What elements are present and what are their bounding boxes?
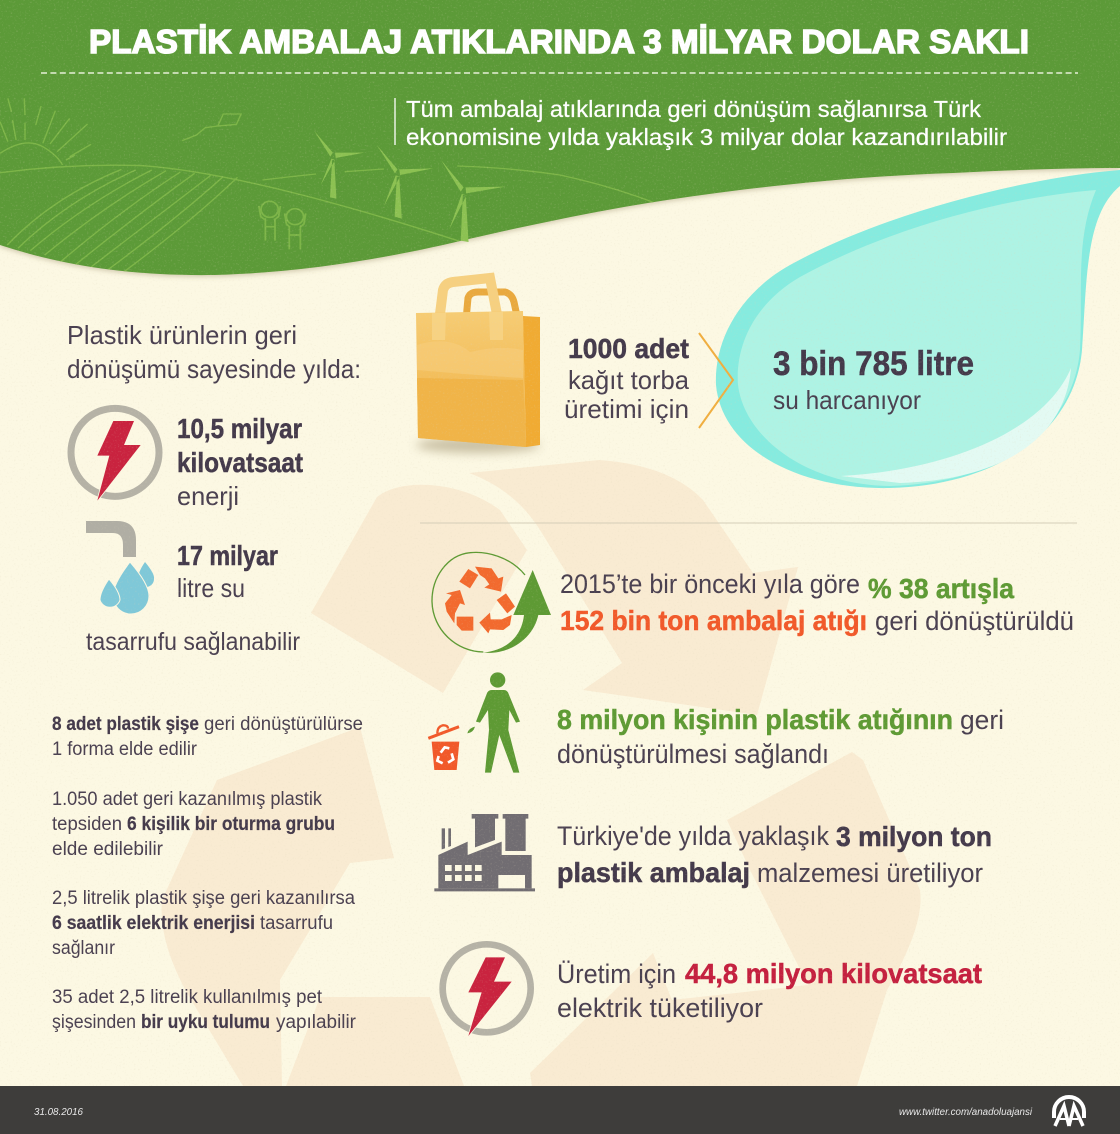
icon: AA logo	[1054, 1097, 1084, 1126]
fact: electricity: 2,5 litrelik plastik şişe geri kazanılırsa	[52, 888, 355, 909]
fact: seating	[52, 789, 335, 860]
facts list	[52, 714, 363, 1033]
bag text: üretimi için	[564, 394, 689, 424]
twitter address: www.twitter.com/anadoluajansi	[899, 1107, 1033, 1118]
production text: malzemesi üretiliyor	[757, 858, 983, 888]
fact: sleeping bag	[52, 987, 357, 1033]
fact: sleeping bag: 35 adet 2,5 litrelik kullanılmış pet	[52, 987, 323, 1008]
background recycling symbol	[162, 460, 921, 1086]
subtitle: Tüm ambalaj atıklarında geri dönüşüm sağlanırsa Türk	[406, 96, 982, 122]
wind turbines	[314, 131, 506, 242]
fact: sleeping bag: şişesinden	[52, 1012, 136, 1033]
production text: plastik ambalaj	[557, 857, 750, 888]
production text: Türkiye'de yılda yaklaşık	[557, 821, 829, 851]
fact: seating: 6 kişilik bir oturma grubu	[127, 814, 335, 835]
energy text	[177, 413, 303, 511]
water text: su harcanıyor	[773, 385, 921, 415]
fact: electricity: tasarrufu	[260, 913, 333, 934]
water drop	[716, 170, 1120, 488]
fact: seating: elde edilebilir	[52, 839, 164, 860]
divider	[420, 522, 1077, 524]
drop highlight	[841, 368, 1071, 483]
energy text: kilovatsaat	[177, 447, 303, 478]
fact: sleeping bag: bir uyku tulumu	[141, 1012, 270, 1033]
water text	[86, 540, 300, 656]
turbine 1	[314, 131, 364, 199]
fact: electricity: 6 saatlik elektrik enerjisi	[52, 913, 255, 934]
footer	[0, 1086, 1120, 1134]
subtitle	[395, 96, 1007, 150]
production text	[557, 821, 992, 888]
landscape line art	[0, 98, 660, 275]
fact: seating: tepsiden	[52, 814, 122, 835]
people text: dönüştürülmesi sağlandı	[557, 739, 829, 769]
fact: seating: 1.050 adet geri kazanılmış plastik	[52, 789, 322, 810]
icon: tap and water drops	[86, 521, 154, 614]
people text: 8 milyon kişinin plastik atığının	[557, 704, 953, 735]
turbine 2	[377, 145, 433, 219]
icon: person and bin	[428, 672, 520, 773]
dashed rule	[41, 72, 1078, 74]
recycling text: 2015’te bir önceki yıla göre	[560, 569, 860, 599]
fact: bottles: geri dönüştürülürse	[204, 714, 363, 735]
water text: tasarrufu sağlanabilir	[86, 628, 300, 656]
chevron arrow	[699, 333, 733, 428]
green header	[0, 0, 1120, 275]
children	[259, 201, 306, 249]
title: PLASTİK AMBALAJ ATIKLARINDA 3 MİLYAR DOLAR SAKLI	[89, 23, 1029, 60]
fact: bottles	[52, 714, 363, 760]
electricity text: 44,8 milyon kilovatsaat	[685, 958, 982, 989]
left intro heading	[67, 320, 361, 384]
fact: electricity	[52, 888, 355, 959]
water text: litre su	[177, 573, 245, 603]
icon: lightning ring	[71, 408, 159, 501]
left intro heading: dönüşümü sayesinde yılda:	[67, 354, 361, 384]
water text	[773, 345, 974, 415]
recycling text: % 38 artışla	[868, 573, 1014, 604]
energy text: enerji	[177, 481, 239, 511]
fact: bottles: 1 forma elde edilir	[52, 739, 198, 760]
icon: factory	[434, 814, 535, 891]
bag text	[564, 333, 690, 424]
people text	[557, 704, 1004, 769]
recycling text: geri dönüştürüldü	[875, 606, 1074, 636]
bag text: kağıt torba	[568, 365, 690, 395]
hills and field	[0, 165, 660, 275]
people text: geri	[960, 705, 1004, 735]
subtitle: ekonomisine yılda yaklaşık 3 milyar dolar kazandırılabilir	[406, 124, 1007, 150]
electricity text: Üretim için	[557, 959, 676, 989]
bag handles	[438, 278, 517, 330]
fact: electricity: sağlanır	[52, 938, 116, 959]
icon: lightning ring small	[443, 944, 531, 1036]
fact: bottles: 8 adet plastik şişe	[52, 714, 199, 735]
water text: 3 bin 785 litre	[773, 345, 974, 383]
recycling text	[560, 569, 1074, 636]
fact: sleeping bag: yapılabilir	[276, 1012, 357, 1033]
production text: 3 milyon ton	[836, 821, 992, 852]
recycling text: 152 bin ton ambalaj atığı	[560, 605, 867, 636]
energy text: 10,5 milyar	[177, 413, 302, 444]
icon: recycle with arrow	[432, 552, 551, 653]
paper bag	[416, 278, 540, 453]
electricity text	[557, 958, 982, 1023]
date: 31.08.2016	[34, 1107, 83, 1118]
turbine 3	[441, 160, 506, 242]
sun	[0, 98, 91, 165]
left intro heading: Plastik ürünlerin geri	[67, 320, 297, 350]
electricity text: elektrik tüketiliyor	[557, 993, 763, 1023]
water text: 17 milyar	[177, 540, 278, 571]
bag text: 1000 adet	[568, 333, 689, 364]
kite	[182, 114, 241, 141]
